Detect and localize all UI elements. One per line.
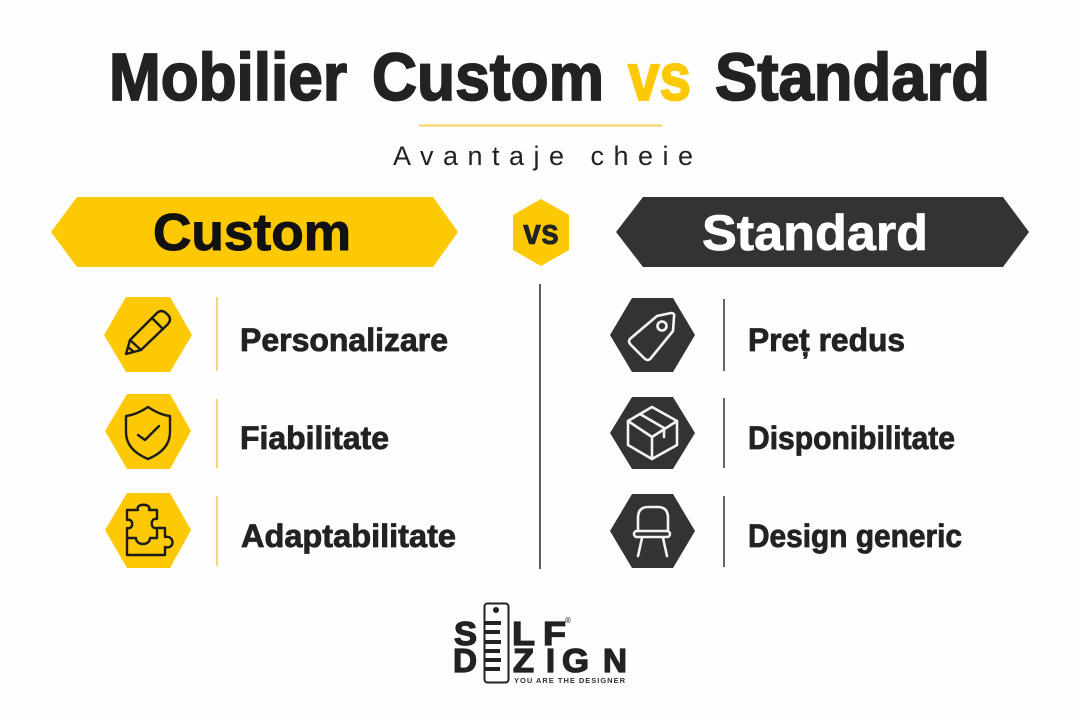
vs badge (513, 199, 569, 266)
subtitle: Avantaje cheie (393, 141, 693, 171)
icon: chair (634, 507, 670, 556)
row: Disponibilitate: Disponibilitate (748, 420, 955, 456)
title: Custom (372, 40, 604, 115)
row: Adaptabilitate (105, 493, 456, 568)
logo: Self Dezign: N (603, 642, 627, 679)
ruler mark (484, 604, 508, 682)
title: Mobilier (109, 40, 347, 115)
row: Preț redus: Preț redus (748, 322, 905, 358)
title (109, 40, 990, 115)
row: Adaptabilitate: Adaptabilitate (241, 518, 456, 554)
logo: Self Dezign: ® (565, 616, 571, 625)
logo: Self Dezign: I (546, 642, 555, 679)
icon: price tag (629, 313, 674, 360)
title: vs (628, 40, 691, 115)
row: Fiabilitate: Fiabilitate (240, 420, 389, 456)
logo: Self Dezign: D (453, 642, 477, 679)
logo: Self Dezign: Z (513, 642, 534, 679)
row: Preț redus (610, 298, 905, 372)
header: Standard: Standard (702, 205, 928, 261)
logo: Self Dezign: YOU ARE THE DESIGNER (514, 676, 626, 685)
logo: Self Dezign: L (512, 615, 535, 652)
header: Custom: Custom (153, 204, 351, 262)
row: Personalizare (104, 297, 448, 372)
icon: box (628, 407, 677, 459)
header: Standard (616, 197, 1029, 267)
panel: custom advantages (104, 297, 456, 568)
logo: Self Dezign: G (562, 642, 589, 679)
icon: puzzle pieces (127, 505, 172, 555)
icon: pencil (126, 311, 170, 354)
row: Personalizare: Personalizare (240, 322, 448, 358)
vs badge: vs (523, 211, 559, 252)
row: Design generic: Design generic (748, 518, 962, 554)
logo: Self Dezign: S (454, 615, 477, 652)
header: Custom (51, 197, 458, 267)
row: Design generic (610, 494, 962, 568)
panel: standard advantages (610, 298, 962, 568)
row: Fiabilitate (105, 394, 389, 469)
icon: shield with check (126, 407, 170, 459)
title: Standard (715, 40, 990, 115)
logo: Self Dezign (453, 604, 627, 685)
logo: Self Dezign: F (543, 615, 566, 652)
row: Disponibilitate (610, 397, 955, 469)
